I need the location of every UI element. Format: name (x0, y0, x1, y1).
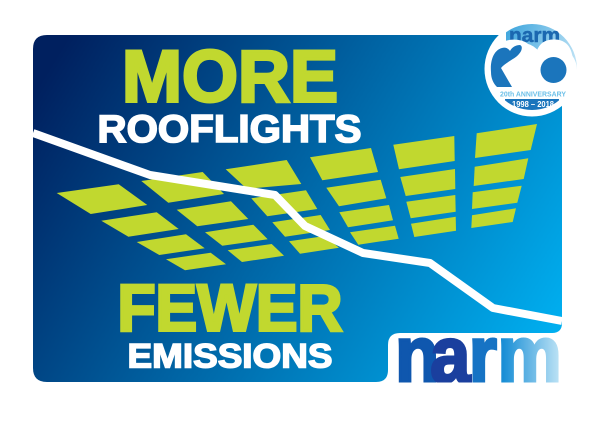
declining emissions line (33, 133, 562, 321)
narm logo: r (469, 311, 497, 400)
large 20 numeral: 20 (494, 28, 574, 104)
narm logo: a (430, 311, 471, 400)
narm logo: n (395, 311, 439, 400)
numeral counter shapes (491, 45, 566, 87)
20th anniversary badge (484, 24, 577, 116)
date band (505, 99, 559, 111)
anniversary caption: 20th ANNIVERSARY (500, 90, 566, 98)
badge wordmark: narm (509, 25, 560, 47)
heading: FEWER: FEWER (118, 272, 342, 344)
narm logo: m (498, 311, 562, 400)
heading: MORE: MORE (122, 36, 338, 118)
narm logo (398, 338, 558, 382)
white mass of the numerals (501, 43, 577, 94)
badge sky crescent (506, 24, 577, 69)
background panel (33, 35, 562, 382)
rooflights grid (57, 124, 537, 270)
heading: EMISSIONS: EMISSIONS (128, 337, 332, 375)
date text: 1998 – 2018 (512, 100, 555, 109)
heading: ROOFLIGHTS: ROOFLIGHTS (98, 108, 362, 151)
